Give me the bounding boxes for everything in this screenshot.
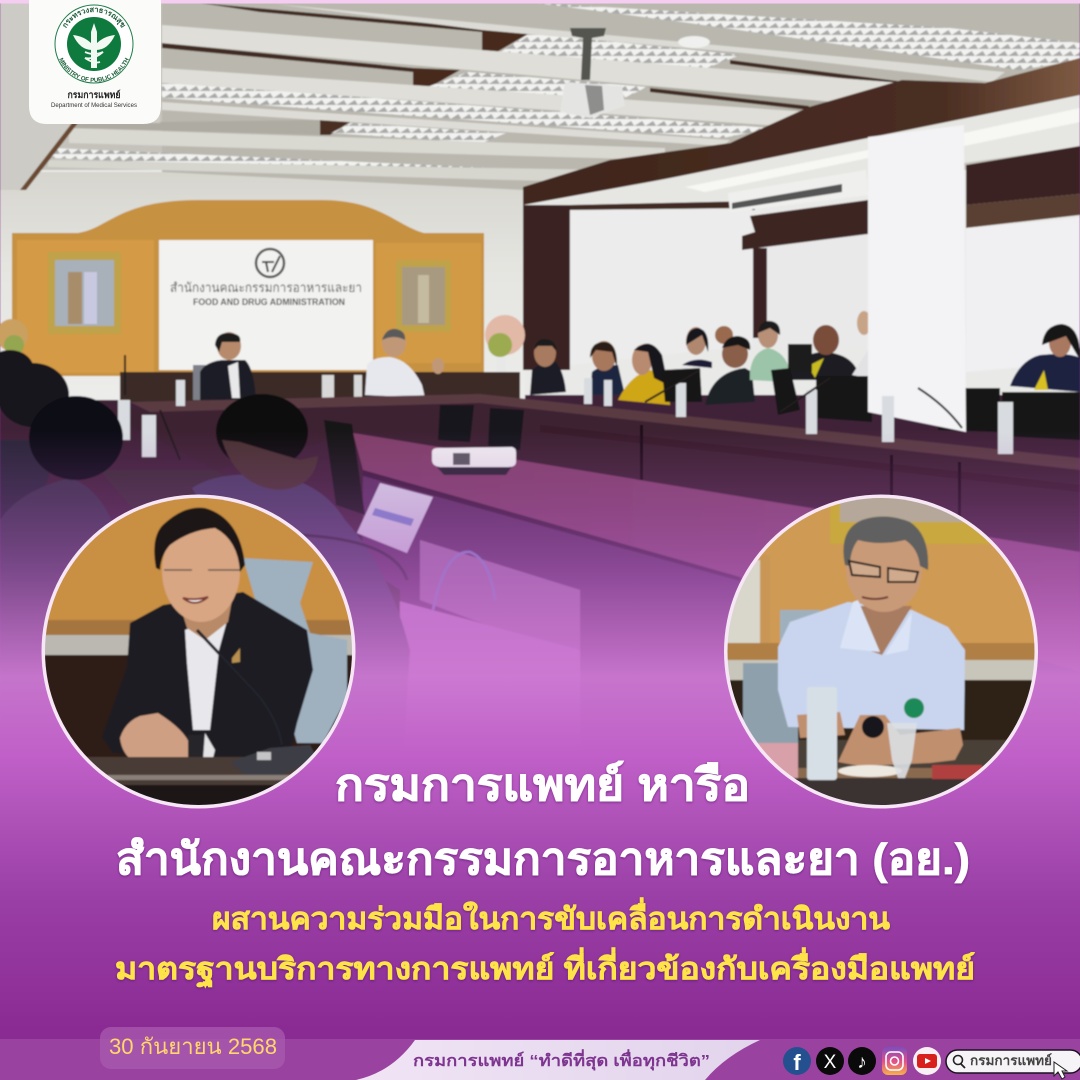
icon: tiktok — [848, 1047, 876, 1075]
icon: youtube — [913, 1047, 941, 1075]
table — [796, 778, 966, 805]
room base — [0, 150, 1080, 815]
department name english: Department of Medical Services — [51, 103, 137, 109]
icon: cursor — [1054, 1062, 1067, 1079]
table microphones — [125, 355, 962, 460]
chairs at far table front — [438, 405, 524, 450]
portrait circle right — [724, 494, 1044, 818]
ministry emblem: กระทรวงสาธารณสุข — [63, 7, 126, 28]
icon: instagram — [882, 1047, 907, 1075]
pink top strip — [0, 0, 1080, 4]
subheading line 2: มาตรฐานบริการทางการแพทย์ ที่เกี่ยวข้องกับเครื่องมือแพทย์ — [115, 947, 975, 989]
white FDA signboard — [159, 240, 373, 370]
hands and watch — [120, 713, 190, 762]
headline line 1: กรมการแพทย์ หารือ — [335, 760, 750, 810]
department name thai: กรมการแพทย์ — [68, 89, 120, 101]
table projector — [432, 447, 516, 475]
footer band — [0, 1039, 1080, 1080]
white column — [868, 125, 966, 432]
head — [846, 540, 922, 612]
left foreground table — [100, 470, 400, 660]
air conditioner — [728, 170, 868, 212]
water bottle — [807, 687, 837, 780]
right side attendees — [530, 311, 1080, 405]
royal portrait left — [48, 252, 121, 334]
badge — [904, 698, 924, 718]
ceiling projector — [560, 28, 710, 118]
search box: กรมการแพทย์ — [970, 1053, 1052, 1068]
ministry emblem: MINISTRY OF PUBLIC HEALTH — [59, 58, 129, 82]
suit — [102, 592, 313, 760]
ceiling beams — [275, 4, 1005, 82]
icon: X: X — [824, 1052, 837, 1073]
icon: X — [816, 1047, 844, 1075]
drinking glass — [887, 723, 917, 778]
royal portrait right — [396, 260, 451, 332]
portrait circle left — [40, 494, 360, 810]
logo card — [29, 0, 161, 124]
icon: tiktok: ♪ — [857, 1052, 867, 1073]
shirt — [778, 602, 965, 730]
purple gradient overlay — [0, 430, 1080, 1080]
ministry emblem — [54, 4, 134, 84]
slogan ribbon: กรมการแพทย์ “ทำดีที่สุด เพื่อทุกชีวิต” — [413, 1049, 710, 1071]
neck and collar — [853, 606, 912, 655]
brown ceiling beam — [523, 58, 1080, 205]
arms — [838, 715, 963, 766]
flower arrangements — [0, 315, 525, 378]
search box — [946, 1050, 1080, 1079]
table front and under panel — [360, 470, 1080, 815]
back wall rail — [120, 372, 520, 402]
subheading line 1: ผสานความร่วมมือในการขับเคลื่อนการดำเนินงาน — [212, 897, 891, 936]
date badge — [100, 1027, 285, 1069]
ceiling lights — [537, 3, 1080, 70]
near table top — [353, 433, 1080, 672]
water bottles on table — [118, 378, 1013, 457]
date badge: 30 กันยายน 2568 — [109, 1034, 277, 1059]
back seated officials — [193, 329, 444, 400]
icon: facebook: f — [793, 1050, 801, 1075]
neck and face — [182, 603, 233, 640]
far table — [100, 394, 1080, 560]
slogan ribbon — [356, 1040, 760, 1080]
table — [87, 756, 302, 786]
white FDA signboard: FOOD AND DRUG ADMINISTRATION — [193, 297, 345, 308]
ceiling — [0, 0, 1080, 190]
lower ceiling and wall — [523, 95, 1080, 372]
icon: facebook — [783, 1047, 811, 1075]
black chairs — [662, 368, 1080, 440]
headline line 2: สำนักงานคณะกรรมการอาหารและยา (อย.) — [116, 835, 970, 884]
foreground attendees — [0, 350, 410, 815]
white FDA signboard: สำนักงานคณะกรรมการอาหารและยา — [170, 280, 362, 295]
background photo: meeting room — [0, 0, 1080, 815]
microphone — [196, 628, 220, 656]
wood wall panel — [12, 200, 484, 376]
laptop and cables — [300, 483, 495, 610]
shirt — [184, 622, 228, 732]
